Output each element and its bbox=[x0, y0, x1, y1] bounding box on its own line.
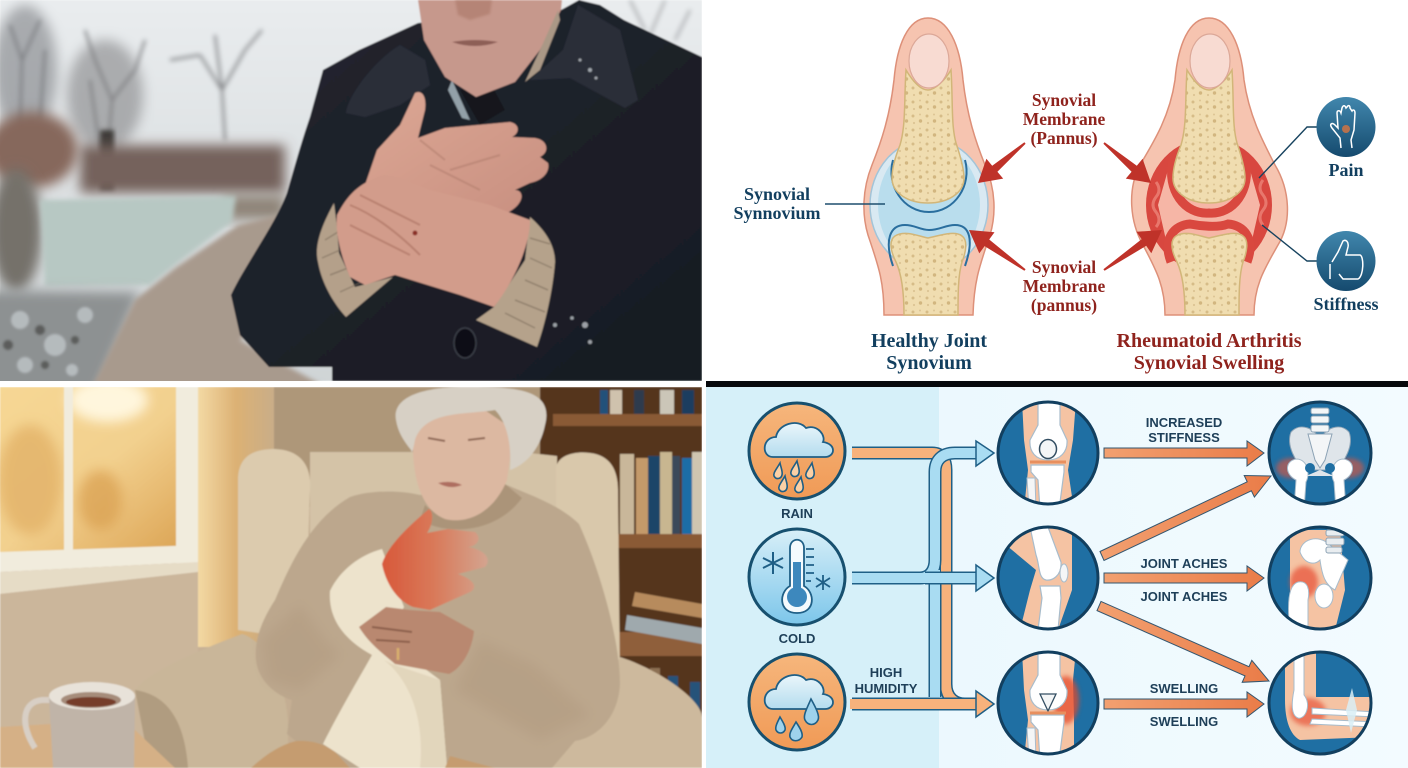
label: upper synovial membrane: Membrane bbox=[1023, 109, 1106, 129]
icon: hip side view bbox=[1269, 527, 1371, 630]
arrow: knee to hip, increased stiffness bbox=[1104, 441, 1264, 466]
label: rheumatoid arthritis: Synovial Swelling bbox=[1134, 352, 1284, 374]
bookshelf bbox=[539, 387, 702, 716]
window glass bbox=[0, 387, 176, 552]
label: synovial synnovium: Synnovium bbox=[733, 203, 821, 223]
teacup bbox=[25, 682, 135, 768]
label: healthy joint: Healthy Joint bbox=[871, 330, 987, 352]
icon: elbow bbox=[1269, 650, 1375, 754]
arrow: knee to elbow, swelling bbox=[1104, 692, 1264, 717]
orange arrow: humidity bbox=[852, 698, 978, 710]
table bbox=[0, 724, 175, 768]
label: swelling upper: SWELLING bbox=[1150, 681, 1218, 696]
hedge bbox=[0, 112, 78, 188]
arrow: knee to hip, diagonal up bbox=[1100, 476, 1271, 560]
icon: stiffness bbox=[1262, 225, 1376, 291]
label: high humidity: HUMIDITY bbox=[855, 681, 918, 696]
icon: hip and pelvis bbox=[1269, 402, 1371, 510]
face and neck bbox=[418, 0, 562, 97]
label: upper synovial membrane: Synovial bbox=[1032, 90, 1096, 110]
icon: knee one bbox=[998, 400, 1098, 510]
arrow: lower left to healthy membrane bbox=[969, 230, 1026, 271]
blurred bare trees bbox=[10, 0, 690, 150]
label: joint aches lower: JOINT ACHES bbox=[1141, 589, 1228, 604]
frost flecks on coat bbox=[553, 58, 598, 344]
icon: rain bbox=[749, 403, 845, 499]
blanket bbox=[251, 741, 495, 768]
label: lower synovial membrane: Membrane bbox=[1023, 276, 1106, 296]
coat bbox=[231, 0, 702, 381]
lower hand bbox=[337, 175, 530, 307]
flow arrows: weather to joints bbox=[850, 441, 994, 717]
label: synovial synnovium: Synovial bbox=[744, 184, 810, 204]
armchair bbox=[135, 449, 702, 768]
orange branch: rain bbox=[852, 453, 965, 704]
lower wall bbox=[0, 572, 198, 740]
panel: cosy indoor photo, woman warming her hand bbox=[0, 378, 702, 768]
panel: winter photo, woman holding sore hands bbox=[0, 0, 702, 400]
frost ground bbox=[0, 284, 142, 381]
window frame bbox=[0, 387, 200, 594]
supporting hand bbox=[359, 607, 474, 674]
label: upper synovial membrane: (Pannus) bbox=[1030, 128, 1098, 148]
label: rain: RAIN bbox=[781, 506, 813, 521]
blue branch: cold bbox=[852, 453, 978, 578]
cuffs bbox=[317, 203, 393, 317]
icon: high humidity bbox=[749, 654, 845, 750]
arrow: upper left to healthy membrane bbox=[978, 142, 1026, 183]
arrow: upper right to swollen membrane bbox=[1103, 142, 1151, 183]
label: pain: Pain bbox=[1328, 160, 1364, 180]
arrow: knee to elbow, diagonal down bbox=[1097, 601, 1269, 682]
wall bbox=[80, 145, 285, 193]
label: healthy joint: Synovium bbox=[886, 352, 972, 374]
frosted lawn bbox=[40, 196, 236, 286]
divider bar bbox=[706, 381, 1408, 387]
label: stiffness: Stiffness bbox=[1313, 294, 1379, 314]
inflamed hand bbox=[382, 509, 488, 610]
label: increased stiffness: INCREASED bbox=[1146, 415, 1222, 430]
label: joint aches upper: JOINT ACHES bbox=[1141, 556, 1228, 571]
sweater bbox=[256, 485, 620, 768]
label: lower synovial membrane: Synovial bbox=[1032, 257, 1096, 277]
healthy finger joint bbox=[864, 18, 994, 315]
upper hand bbox=[365, 92, 548, 214]
head and hair bbox=[396, 387, 546, 520]
back wall bbox=[274, 387, 540, 474]
panel: weather effects flow chart bbox=[706, 387, 1408, 768]
coat button bbox=[454, 328, 476, 358]
label: cold: COLD bbox=[779, 631, 815, 646]
curtain bbox=[198, 387, 274, 647]
arrow: lower right to swollen membrane bbox=[1103, 230, 1162, 271]
icon: knee two, bent bbox=[998, 525, 1098, 630]
icon: knee three, swollen bbox=[998, 650, 1098, 760]
path bbox=[95, 216, 320, 381]
label: rheumatoid arthritis: Rheumatoid Arthritis bbox=[1116, 330, 1302, 352]
label: swelling lower: SWELLING bbox=[1150, 714, 1218, 729]
arthritic finger joint bbox=[1132, 18, 1287, 315]
label: increased stiffness: STIFFNESS bbox=[1148, 430, 1220, 445]
arrow: knee to hip, joint aches bbox=[1104, 566, 1264, 591]
collar bbox=[346, 45, 430, 117]
label: high humidity: HIGH bbox=[870, 665, 902, 680]
label: lower synovial membrane: (pannus) bbox=[1031, 295, 1097, 315]
panel: healthy joint vs rheumatoid arthritis diagram bbox=[733, 18, 1379, 374]
icon: cold bbox=[749, 529, 845, 625]
towel bbox=[323, 549, 447, 768]
icon: pain bbox=[1259, 97, 1376, 178]
